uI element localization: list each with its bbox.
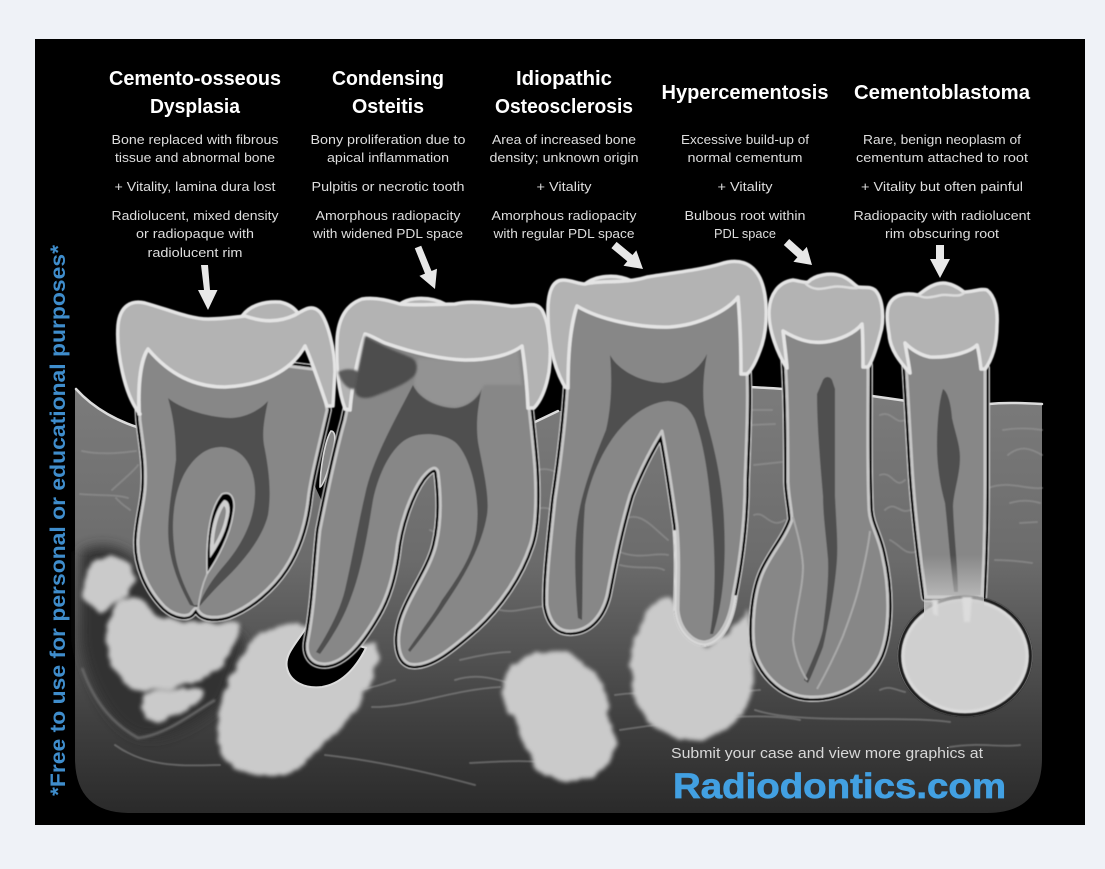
tooth 4: hypercementosis <box>753 274 888 697</box>
heading column 4: + Vitality <box>718 179 773 194</box>
heading column 4: normal cementum <box>688 150 802 165</box>
heading column 5: + Vitality but often painful <box>861 179 1023 194</box>
periapical lesion: condensing osteitis <box>218 623 378 776</box>
pulp and canals <box>316 385 488 654</box>
heading column 3: with regular PDL space <box>492 226 634 241</box>
heading column 1: Bone replaced with fibrous <box>112 132 279 147</box>
heading column 5: cementum attached to root <box>856 150 1028 165</box>
tooth 1: cemento-osseous dysplasia <box>118 302 335 617</box>
heading column 1: tissue and abnormal bone <box>115 150 275 165</box>
root slit <box>198 493 234 610</box>
heading column 4: Bulbous root within <box>684 208 806 223</box>
light dentine under crown <box>414 350 522 407</box>
heading column 1: Radiolucent, mixed density <box>112 208 279 223</box>
submit caption: Submit your case and view more graphics at <box>671 746 983 762</box>
heading column 4 <box>662 82 828 241</box>
caries in enamel <box>338 369 362 389</box>
tooth 3 extra cusp <box>585 276 632 292</box>
heading column 2: Osteitis <box>352 96 424 118</box>
cementum boundary lines <box>793 517 870 689</box>
tooth 3 crown <box>548 261 766 388</box>
heading column 5 <box>854 82 1031 241</box>
heading column 3 <box>490 68 638 241</box>
tooth 5 crown <box>887 283 997 373</box>
heading column 4: Excessive build-up of <box>681 132 809 147</box>
heading column 3: Amorphous radiopacity <box>492 208 637 223</box>
tooth 2: condensing osteitis <box>307 298 550 664</box>
periapical lesion beneath third tooth <box>631 597 753 741</box>
arrow 1 <box>198 265 218 310</box>
heading column 2: apical inflammation <box>327 150 449 165</box>
heading column 1: Cemento-osseous <box>109 68 281 90</box>
pulp canal <box>804 377 837 683</box>
tooth 2 extra cusp <box>400 298 445 312</box>
heading column 5: rim obscuring root <box>885 226 999 241</box>
arrow 4 <box>784 239 812 265</box>
heading column 1 <box>109 68 281 260</box>
heading column 2: with widened PDL space <box>312 226 463 241</box>
inner root dentine <box>173 447 255 605</box>
tooth 1 crown <box>118 302 335 414</box>
tooth 1 extra cusp <box>242 302 298 325</box>
caries in dentine <box>355 336 417 398</box>
heading column 3: + Vitality <box>536 179 592 194</box>
periapical lesion: idiopathic osteosclerosis <box>502 652 615 780</box>
tooth 5: cementoblastoma <box>887 283 997 597</box>
pulp and canals <box>575 354 725 634</box>
heading column 1: radiolucent rim <box>148 245 242 260</box>
dark halo around periapical lesions <box>80 546 245 738</box>
trabecular lines <box>80 410 1042 785</box>
heading column 2: Pulpitis or necrotic tooth <box>312 179 464 194</box>
heading column 3: density; unknown origin <box>490 150 638 165</box>
tooth 4 crown <box>769 274 883 368</box>
bone sliver between teeth 1 and 2 <box>320 431 335 487</box>
pulp canal <box>937 389 960 592</box>
heading column 5: Radiopacity with radiolucent <box>854 208 1031 223</box>
website logo: Radiodontics.com <box>673 767 1006 806</box>
arrow 2 <box>415 246 437 289</box>
cementoblastoma mass <box>898 555 1032 716</box>
side note: *Free to use for personal or educational purposes* <box>47 244 70 796</box>
heading column 2: Condensing <box>332 68 444 90</box>
heading column 4: Hypercementosis <box>662 82 828 104</box>
tooth 3: idiopathic osteosclerosis <box>547 261 766 642</box>
heading column 4: PDL space <box>714 226 776 241</box>
periapical lesions: cemento-osseous dysplasia <box>83 557 240 723</box>
heading column 2: Amorphous radiopacity <box>316 208 461 223</box>
tooth 2 crown <box>337 298 550 410</box>
tooth 5 cusp line <box>918 293 964 297</box>
heading column 2: Bony proliferation due to <box>310 132 466 147</box>
heading column 3: Area of increased bone <box>492 132 636 147</box>
arrow 5 <box>930 245 950 278</box>
heading column 2 <box>310 68 466 241</box>
arrow 3 <box>611 242 643 269</box>
widened PDL black apex <box>287 625 366 687</box>
heading column 1: Dysplasia <box>150 96 241 118</box>
heading column 3: Idiopathic <box>516 68 612 90</box>
heading column 5: Cementoblastoma <box>854 82 1031 104</box>
tooth 4 cusp line <box>806 284 857 289</box>
heading column 1: or radiopaque with <box>136 226 254 241</box>
pulp chamber <box>168 398 270 607</box>
heading column 5: Rare, benign neoplasm of <box>863 132 1021 147</box>
heading column 3: Osteosclerosis <box>495 96 633 118</box>
bone background <box>75 387 1042 813</box>
heading column 1: + Vitality, lamina dura lost <box>114 179 276 194</box>
